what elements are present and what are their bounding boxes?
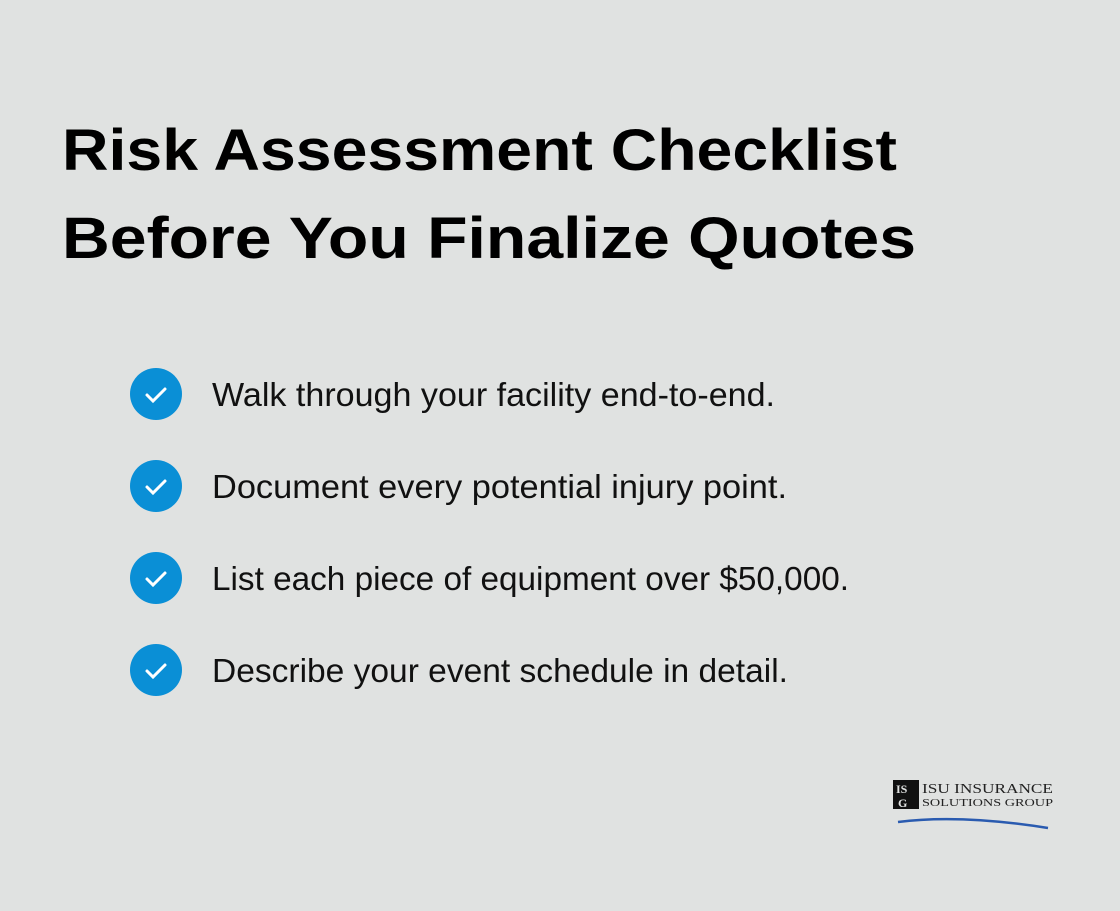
item 4: Describe your event schedule in detail. — [212, 652, 788, 689]
item 1: Walk through your facility end-to-end. — [212, 376, 775, 413]
checklist — [130, 368, 849, 696]
logo: G — [898, 796, 907, 810]
item 2: Document every potential injury point. — [212, 468, 787, 505]
title: Risk Assessment Checklist — [62, 118, 897, 183]
logo: ISU INSURANCE — [922, 782, 1053, 797]
item 3 — [130, 552, 849, 604]
item 3: List each piece of equipment over $50,000. — [212, 560, 849, 597]
logo: SOLUTIONS GROUP — [922, 797, 1053, 809]
logo — [893, 780, 1053, 828]
title: Before You Finalize Quotes — [62, 206, 916, 271]
item 2 — [130, 460, 787, 512]
item 1 — [130, 368, 775, 420]
logo: IS — [896, 782, 908, 796]
item 4 — [130, 644, 788, 696]
title — [62, 118, 916, 271]
